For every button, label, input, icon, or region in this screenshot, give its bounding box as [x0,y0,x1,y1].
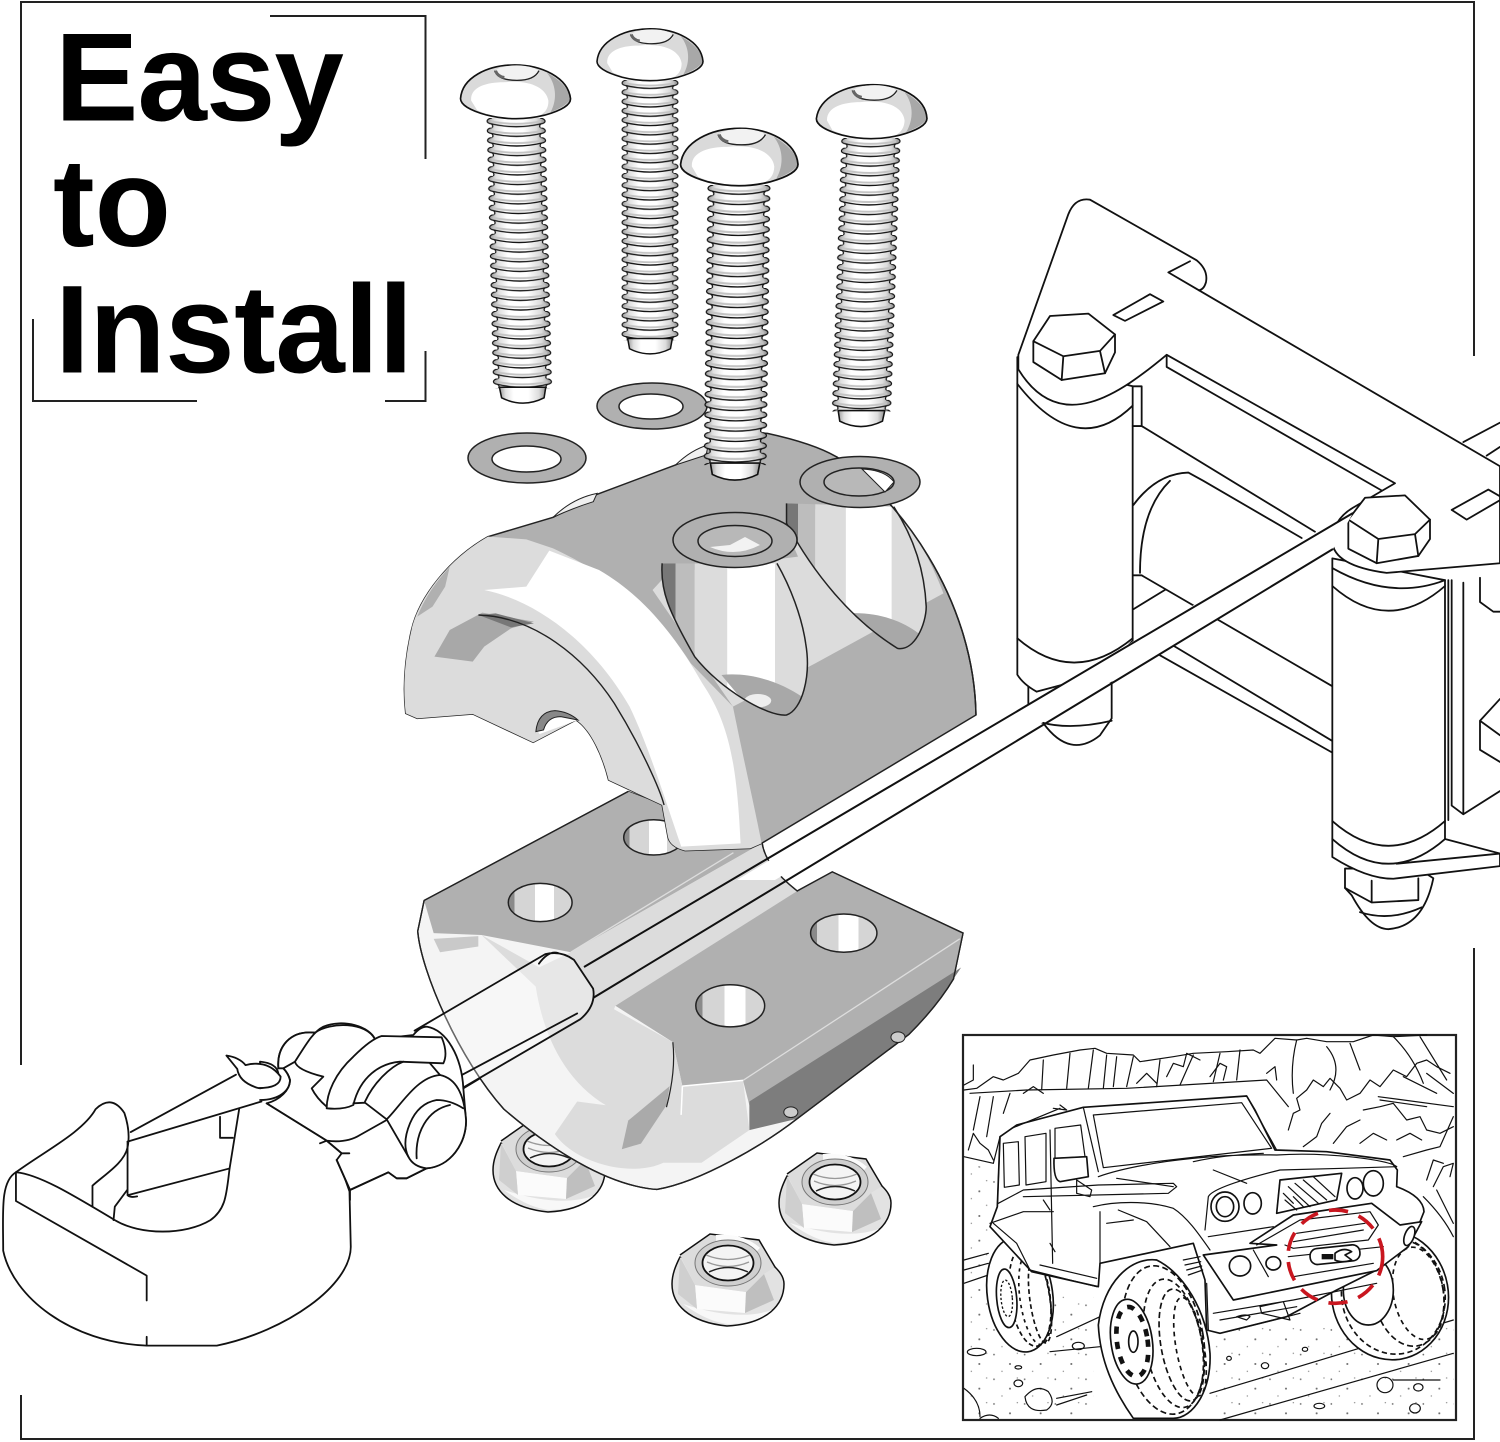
fairlead [1000,199,1500,929]
washer: left [468,433,586,483]
plate slots and edges [1113,261,1500,520]
winch rope [584,513,1353,998]
front light face [404,537,762,851]
bolt: right [806,85,928,427]
notch [538,711,578,734]
rope through fairlead [1000,510,1353,747]
counterbore right [787,504,926,633]
left flat face [424,791,762,952]
title: Easy [55,8,343,148]
title: Install [55,260,413,400]
shackle lines [260,1023,427,1200]
jeep line drawing [964,1035,1459,1421]
shackle pin [353,1062,480,1168]
jeep body [990,1096,1424,1333]
rocks [964,1342,1440,1418]
right front tire [1321,1221,1459,1369]
ground stipple [965,1163,1453,1417]
hook shank end [260,1062,278,1088]
highlight lines [571,853,960,1080]
grille [1277,1173,1342,1213]
rear tire [980,1234,1060,1356]
counterbore left outline [662,563,807,715]
clamp silhouette [418,791,963,1189]
fairlead right side plate [1452,578,1500,814]
washer: rear [597,383,707,429]
shackle [260,1023,480,1200]
arch edge [478,615,664,805]
right flat face [615,872,963,1105]
fairlead lower bars and roller [1133,426,1335,752]
road lines [964,1253,1453,1420]
silhouette outline [418,791,963,1189]
lower clamp half [418,791,963,1189]
top plate [1018,199,1500,573]
rope sleeve and hook [3,953,594,1346]
inset: vehicle location [963,1035,1459,1421]
translucent sleeve [415,953,594,1088]
arch dark patch [478,613,534,627]
bolt: front [676,128,799,480]
mountains [964,1035,1453,1237]
rear counterbore hints [553,445,708,517]
nut: front [672,1234,784,1326]
fairlead right roller [1332,558,1500,929]
fairlead left roller [1017,357,1142,745]
hex bolt: left [1033,314,1115,380]
headlights [1211,1171,1383,1221]
counterbore left [662,564,806,708]
front left tire [1098,1259,1216,1421]
bull bar and bumper [1203,1203,1422,1300]
jeep windows and body lines [990,1096,1397,1332]
front face patches [434,936,743,1149]
lit area around counterbores [653,507,943,707]
side holes [784,1032,905,1118]
washer: on left counterbore [673,512,797,568]
clamp body [404,433,976,851]
counterbore right outline [787,503,926,649]
notch shadow [536,711,578,732]
bull bar and bumper details [1229,1212,1417,1277]
front face shading [482,935,749,1169]
arch shading [434,613,534,662]
nut: right [779,1153,891,1245]
hook latch tab [226,1056,281,1088]
shackle outer body [267,1025,466,1190]
bolt holes [508,820,877,1027]
inset frame [963,1035,1456,1420]
upper clamp half [404,433,976,851]
nut: behind clamp [493,1120,605,1212]
red dashed callout circle [1288,1210,1383,1303]
title bracket [33,16,426,401]
white band [484,551,741,847]
title: to [53,134,171,273]
left shading [417,567,450,617]
outer dome edge [836,457,976,715]
bolt: rear left [460,65,578,403]
shackle arch [327,1036,445,1109]
hex bolt: right [1348,495,1430,563]
bolt: rear middle [597,29,703,354]
cable channel [539,843,797,1029]
hook body [3,1071,351,1346]
washer: on right counterbore [800,456,920,508]
shaded side [749,968,961,1130]
